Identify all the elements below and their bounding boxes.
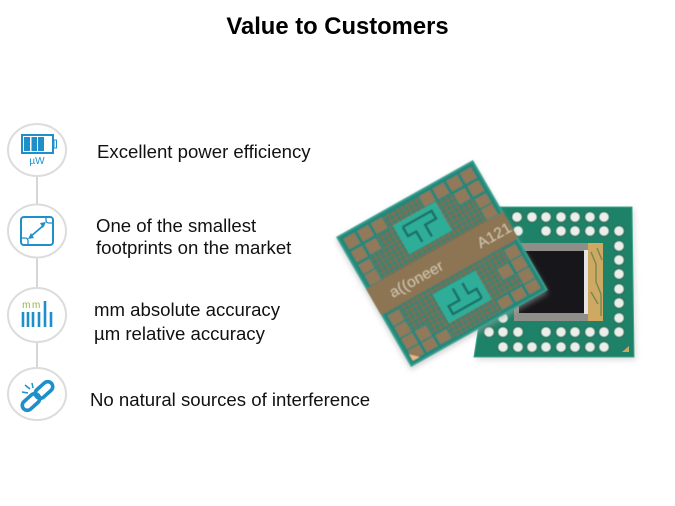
brown logo band bbox=[366, 212, 518, 315]
icon: accuracy bars: mm bbox=[22, 300, 42, 311]
benefit: small footprint bbox=[96, 215, 292, 258]
benefit: no interference: No natural sources of interference bbox=[90, 389, 370, 410]
icon: battery bbox=[8, 124, 66, 176]
antenna top bbox=[393, 202, 452, 254]
icon: accuracy bars bbox=[8, 288, 66, 342]
solder ball halos bbox=[482, 210, 626, 354]
benefit: small footprint: One of the smallest bbox=[96, 215, 256, 236]
title: Value to Customers bbox=[226, 13, 449, 40]
icon: footprint arrow bbox=[8, 204, 66, 258]
image sensor die bbox=[514, 243, 603, 321]
benefit: accuracy: mm absolute accuracy bbox=[94, 299, 280, 320]
logo text: a((oneer bbox=[387, 258, 447, 301]
benefit: power efficiency: Excellent power efficiency bbox=[97, 141, 311, 162]
benefit: small footprint: footprints on the market bbox=[96, 237, 291, 258]
benefit: accuracy bbox=[94, 299, 280, 344]
solder balls bbox=[484, 212, 624, 352]
benefit: accuracy: µm relative accuracy bbox=[94, 323, 265, 344]
antenna bottom bbox=[433, 271, 492, 323]
large outer pads bbox=[342, 166, 542, 361]
chip: top with antenna and logo bbox=[336, 160, 548, 370]
icon: battery: µW bbox=[29, 156, 45, 167]
icon: broken link bbox=[8, 368, 66, 420]
chip: top with antenna and logo: A121 bbox=[474, 220, 515, 252]
chip: underside with solder balls bbox=[474, 207, 636, 360]
